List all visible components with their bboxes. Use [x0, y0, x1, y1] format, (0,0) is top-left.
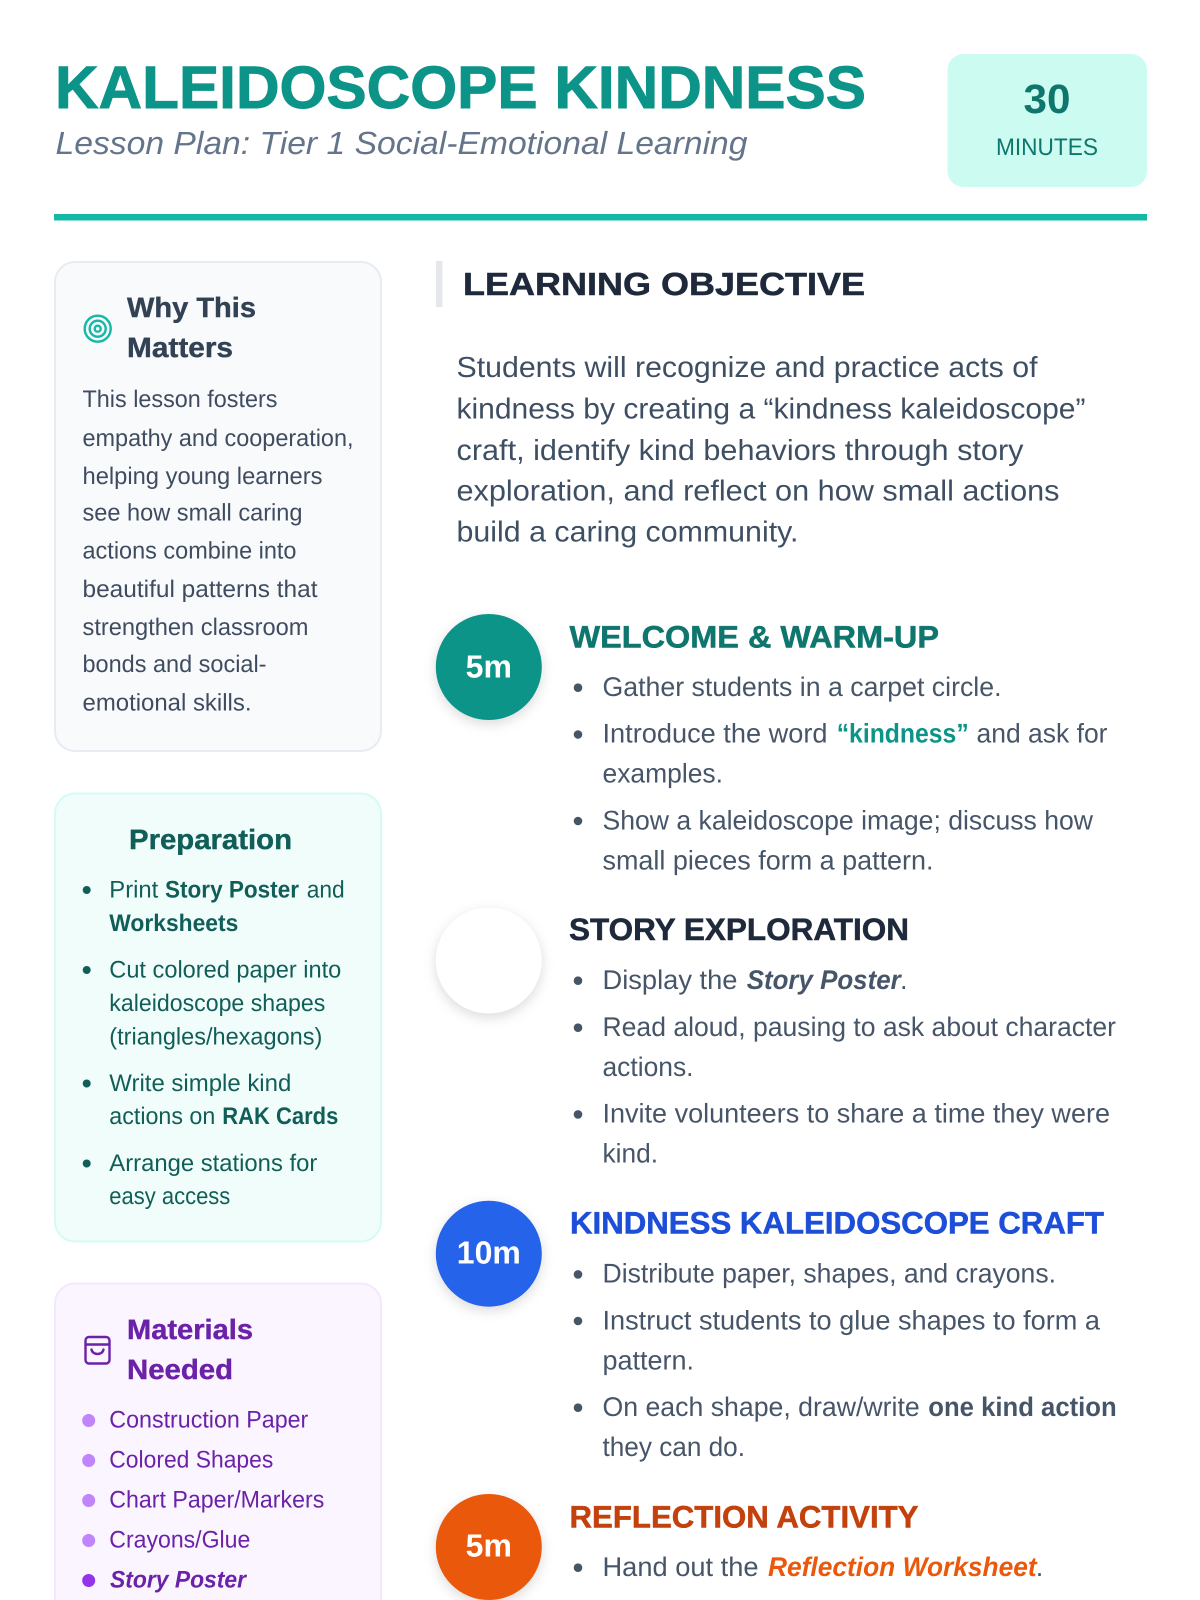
list: preparation: easy access	[109, 1183, 230, 1210]
list: materials: Crayons/Glue	[109, 1526, 250, 1554]
list: preparation: Worksheets	[109, 910, 238, 937]
time badge: 5m	[436, 614, 542, 720]
text block: why this matters: actions combine into	[82, 538, 296, 564]
list: story: kind.	[602, 1139, 658, 1169]
list: materials: Colored Shapes	[109, 1446, 273, 1474]
list: reflection: Hand out the	[602, 1552, 758, 1582]
text block: why this matters: beautiful patterns that	[82, 576, 318, 603]
heading: materials needed: Needed	[127, 1354, 233, 1385]
list: welcome: small pieces form a pattern.	[602, 845, 934, 875]
heading: materials needed	[127, 1314, 253, 1385]
list: materials	[82, 1406, 324, 1594]
text block: why this matters: bonds and social-	[82, 651, 266, 678]
step: welcome and warm-up	[436, 614, 1108, 875]
list: craft: pattern.	[602, 1345, 694, 1375]
heading: learning objective: LEARNING OBJECTIVE	[463, 266, 865, 302]
list: craft: one kind action	[928, 1392, 1117, 1422]
list: preparation: Arrange stations for	[109, 1150, 317, 1177]
list: preparation: RAK Cards	[222, 1103, 338, 1130]
heading: reflection: REFLECTION ACTIVITY	[570, 1500, 919, 1534]
list: preparation: actions on	[109, 1103, 215, 1130]
list: reflection: .	[1036, 1552, 1043, 1582]
list: story: Display the	[602, 965, 738, 995]
heading: why this matters: Matters	[127, 332, 233, 363]
duration badge: 30	[1024, 76, 1070, 122]
list: preparation: Write simple kind	[109, 1070, 291, 1097]
time badge: 5m	[436, 1494, 542, 1600]
list: craft: Instruct students to glue shapes to form a	[602, 1305, 1101, 1335]
list: craft	[574, 1259, 1117, 1462]
text block: why this matters: empathy and cooperation,	[82, 425, 354, 452]
heading: story: STORY EXPLORATION	[569, 912, 909, 947]
list: welcome: Show a kaleidoscope image; discuss how	[602, 805, 1093, 835]
list: welcome	[574, 672, 1108, 875]
list: materials: Construction Paper	[109, 1406, 308, 1434]
step: kindness kaleidoscope craft	[436, 1201, 1117, 1462]
list: welcome: and ask for	[976, 719, 1108, 749]
panel: materials needed	[55, 1284, 381, 1600]
text block: why this matters: strengthen classroom	[82, 614, 308, 641]
learning objective	[436, 261, 1086, 548]
text block: why this matters: see how small caring	[82, 500, 302, 526]
text block: why this matters	[82, 386, 354, 716]
list: welcome: examples.	[602, 759, 723, 789]
text block: objective: build a caring community.	[456, 516, 798, 548]
text block: objective: kindness by creating a “kindness kaleidoscope”	[456, 394, 1086, 426]
text block: why this matters: helping young learners	[82, 463, 322, 490]
list: story: .	[900, 965, 908, 995]
header	[55, 54, 1147, 187]
time badge: 5m: 5m	[466, 648, 512, 684]
text block: why this matters: This lesson fosters	[82, 386, 278, 413]
list: craft: On each shape, draw/write	[602, 1392, 920, 1422]
list: story: Invite volunteers to share a time they were	[602, 1099, 1110, 1129]
list: preparation: (triangles/hexagons)	[109, 1024, 322, 1050]
list: preparation: Cut colored paper into	[109, 956, 341, 984]
heading: why this matters	[127, 292, 256, 363]
heading: why this matters: Why This	[127, 292, 256, 323]
list: welcome: Introduce the word	[602, 719, 828, 749]
list: materials: Story Poster	[110, 1566, 248, 1594]
duration badge	[948, 54, 1147, 187]
time badge: 10m: 10m	[457, 1234, 521, 1270]
icon: target	[85, 316, 111, 342]
text block: objective: Students will recognize and practice acts of	[456, 352, 1038, 384]
time badge: blank white circle	[436, 908, 542, 1014]
list: story: actions.	[602, 1052, 694, 1082]
panel: preparation	[55, 794, 381, 1242]
heading: materials needed: Materials	[127, 1314, 253, 1345]
list: preparation: Story Poster	[165, 876, 299, 904]
list: welcome: “kindness”	[837, 719, 969, 749]
step: story exploration	[436, 908, 1116, 1169]
list: preparation: Print	[109, 876, 159, 904]
title: KALEIDOSCOPE KINDNESS	[55, 54, 866, 121]
list: materials: Chart Paper/Markers	[109, 1486, 324, 1514]
list: preparation: kaleidoscope shapes	[109, 990, 325, 1017]
list: preparation	[83, 876, 345, 1210]
text block: why this matters: emotional skills.	[82, 690, 252, 716]
heading: welcome: WELCOME & WARM-UP	[570, 620, 939, 654]
text block: objective: craft, identify kind behaviors through story	[456, 435, 1024, 467]
list: reflection: Reflection Worksheet	[768, 1552, 1038, 1582]
list: welcome: Gather students in a carpet circle.	[602, 672, 1002, 702]
duration badge: MINUTES	[996, 134, 1098, 161]
panel: why this matters	[55, 262, 381, 751]
list: preparation: and	[307, 876, 345, 904]
heading: craft: KINDNESS KALEIDOSCOPE CRAFT	[570, 1206, 1104, 1240]
heading: preparation: Preparation	[129, 824, 292, 855]
list: story: Read aloud, pausing to ask about character	[602, 1012, 1116, 1042]
list: craft: Distribute paper, shapes, and crayons.	[602, 1259, 1056, 1289]
time badge: 5m: 5m	[466, 1528, 512, 1564]
icon: shopping bag	[86, 1337, 110, 1364]
subtitle: Lesson Plan: Tier 1 Social-Emotional Learning	[56, 125, 748, 161]
step: reflection activity	[436, 1494, 1043, 1600]
list: reflection	[574, 1552, 1043, 1582]
text block: objective	[456, 352, 1086, 548]
list: craft: they can do.	[602, 1432, 745, 1462]
list: story	[574, 965, 1116, 1169]
text block: objective: exploration, and reflect on how small actions	[456, 476, 1060, 508]
list: story: Story Poster	[747, 965, 902, 995]
time badge: 10m	[436, 1201, 542, 1307]
